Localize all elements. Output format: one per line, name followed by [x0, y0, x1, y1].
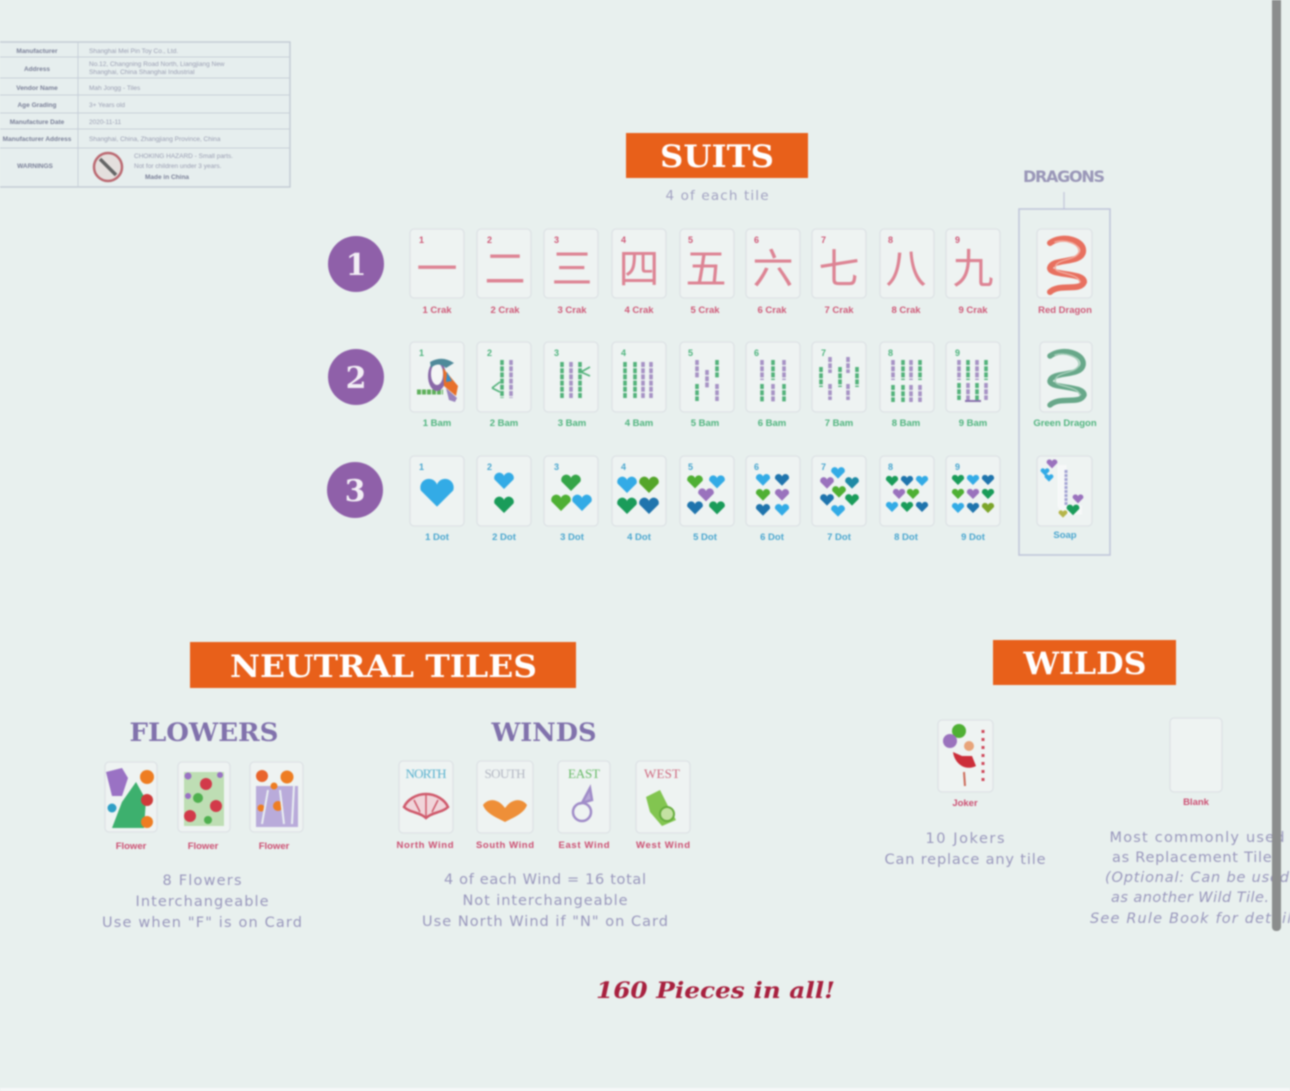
spec table: 3+ Years old	[89, 102, 125, 109]
section: jokers	[884, 720, 1046, 868]
row: crak tiles: 9	[955, 235, 960, 245]
row: dot tiles: 9 Dot	[961, 532, 986, 543]
row: crak tiles: 8	[888, 235, 893, 245]
row: crak tiles: 5 Crak	[690, 305, 720, 316]
row: dot tiles: 4 Dot	[627, 532, 652, 543]
icon: south butterfly	[483, 800, 527, 822]
section: blanks: Most commonly used	[1110, 830, 1284, 846]
section: winds: West Wind	[636, 840, 690, 851]
row: crak tiles: 7	[821, 235, 826, 245]
section: flowers: Use when "F" is on Card	[102, 915, 302, 931]
row: bam tiles	[410, 342, 1000, 429]
number badge 3: 3	[345, 474, 365, 509]
panel: dragons: Soap	[1053, 530, 1077, 541]
icon: north moth	[404, 794, 448, 818]
icon: no small parts warning	[94, 153, 122, 181]
icon: flower tile 3	[256, 770, 298, 827]
spec table: Manufacturer Address	[3, 136, 72, 143]
row: crak tiles: 7 Crak	[824, 305, 854, 316]
icon: toucan	[417, 359, 458, 402]
panel: dragons: Green Dragon	[1033, 418, 1097, 429]
row: crak tiles: 七	[818, 246, 860, 292]
row: crak tiles: 八	[886, 246, 926, 292]
section: flowers: FLOWERS	[130, 718, 278, 747]
row: bam tiles: 2 Bam	[490, 418, 518, 429]
section: winds: North Wind	[396, 840, 454, 851]
row: dot tiles: 5	[688, 462, 693, 472]
row: bam tiles: 5	[688, 348, 693, 358]
section: blanks: Blank	[1183, 797, 1210, 808]
row: dot tiles: 1	[419, 462, 424, 472]
number badge 3	[327, 462, 383, 518]
section: winds: NORTH	[406, 766, 446, 781]
row: bam tiles: 8 Bam	[892, 418, 920, 429]
spec table: Made in China	[145, 174, 189, 181]
spec table: CHOKING HAZARD - Small parts.	[134, 153, 233, 160]
row: crak tiles: 9 Crak	[958, 305, 988, 316]
row: bam tiles: 6	[754, 348, 759, 358]
icon: flower tile 1	[106, 768, 154, 828]
number badge 1: 1	[346, 248, 366, 283]
row: crak tiles: 4 Crak	[624, 305, 654, 316]
row: crak tiles: 6	[754, 235, 759, 245]
row: dot tiles: 2 Dot	[492, 532, 517, 543]
spec table: Address	[24, 66, 50, 73]
icon: green dragon	[1050, 352, 1084, 405]
row: dot tiles: 8	[888, 462, 893, 472]
icon: east rabbit	[573, 788, 592, 821]
row: crak tiles: 2 Crak	[490, 305, 520, 316]
row: crak tiles: 一	[416, 246, 458, 292]
panel: dragons: Red Dragon	[1038, 305, 1092, 316]
row: crak tiles: 2	[487, 235, 492, 245]
heading: wilds: WILDS	[1022, 646, 1146, 682]
section: flowers: Flower	[259, 841, 290, 852]
row: dot tiles: 2	[487, 462, 492, 472]
row: bam tiles: 1	[419, 348, 424, 358]
closing line: piece count: 160 Pieces in all!	[596, 978, 835, 1004]
section: winds: WEST	[644, 766, 680, 781]
icon: joker figure	[943, 724, 983, 786]
section: winds: WINDS	[490, 718, 596, 747]
row: bam tiles: 3	[554, 348, 559, 358]
section: flowers: Interchangeable	[136, 894, 269, 910]
row: crak tiles: 4	[621, 235, 626, 245]
icon: flower tile 2	[184, 772, 224, 826]
icon: soap tile frame	[1041, 459, 1083, 518]
section: jokers: Joker	[952, 798, 978, 809]
section: flowers	[102, 718, 303, 931]
spec table: Manufacturer	[16, 48, 58, 55]
section: winds	[396, 718, 690, 930]
row: dot tiles: 6	[754, 462, 759, 472]
row: dot tiles: 6 Dot	[760, 532, 785, 543]
section: winds: 4 of each Wind = 16 total	[444, 872, 646, 888]
row: crak tiles: 3 Crak	[557, 305, 587, 316]
section: blanks	[1090, 718, 1290, 927]
row: bam tiles: 3 Bam	[558, 418, 586, 429]
row: crak tiles: 九	[952, 246, 994, 292]
spec table: Manufacture Date	[10, 119, 65, 126]
panel: dragons	[1019, 192, 1110, 555]
row: crak tiles: 二	[484, 246, 526, 292]
section: blanks: as another Wild Tile.	[1111, 890, 1269, 906]
section: winds: South Wind	[476, 840, 534, 851]
row: crak tiles: 五	[686, 246, 726, 292]
heading: neutral tiles: NEUTRAL TILES	[230, 649, 537, 685]
row: bam tiles: 6 Bam	[758, 418, 786, 429]
heading: suits	[626, 133, 808, 178]
row: dot tiles	[410, 456, 1000, 543]
row: bam tiles: 7	[821, 348, 826, 358]
heading: wilds	[993, 640, 1176, 685]
section: blanks: (Optional: Can be used	[1105, 870, 1290, 886]
row: dot tiles: 9	[955, 462, 960, 472]
row: bam tiles: 1 Bam	[423, 418, 451, 429]
row: crak tiles: 1	[419, 235, 424, 245]
row: crak tiles: 5	[688, 235, 693, 245]
row: dot tiles: 5 Dot	[693, 532, 718, 543]
row: bam tiles: 2	[487, 348, 492, 358]
spec table: 2020-11-11	[89, 119, 122, 126]
row: dot tiles: 7 Dot	[827, 532, 852, 543]
section: winds: Not interchangeable	[462, 893, 628, 909]
row: crak tiles: 8 Crak	[891, 305, 921, 316]
row: dot tiles: 4	[621, 462, 626, 472]
section: flowers: Flower	[116, 841, 147, 852]
row: dot tiles: 3	[554, 462, 559, 472]
row: crak tiles: 四	[618, 246, 660, 292]
heading: dragons: DRAGONS	[1023, 167, 1105, 186]
row: bam tiles: 4 Bam	[625, 418, 653, 429]
number badge 2	[328, 349, 384, 405]
spec table: Shanghai, China Shanghai Industrial	[89, 69, 195, 76]
spec table	[0, 42, 290, 187]
row: bam tiles: 9 Bam	[959, 418, 987, 429]
section: winds: Use North Wind if "N" on Card	[422, 914, 668, 930]
section: winds: East Wind	[558, 840, 610, 851]
heading: suits: SUITS	[660, 139, 774, 175]
number badge 2: 2	[346, 361, 366, 396]
row: crak tiles: 六	[752, 246, 794, 292]
section: flowers: Flower	[188, 841, 219, 852]
section: winds: EAST	[568, 766, 600, 781]
row: dot tiles: 7	[821, 462, 826, 472]
row: crak tiles: 3	[554, 235, 559, 245]
spec table: Mah Jongg - Tiles	[89, 85, 141, 92]
suits subtitle: 4 of each tile	[666, 188, 768, 204]
spec table: Vendor Name	[16, 85, 58, 92]
row: dot tiles: 3 Dot	[560, 532, 585, 543]
row: bam tiles: 9	[955, 348, 960, 358]
section: blanks: as Replacement Tiles	[1112, 850, 1280, 866]
spec table: WARNINGS	[17, 163, 54, 170]
row: bam tiles: 5 Bam	[691, 418, 719, 429]
row: crak tiles: 1 Crak	[422, 305, 452, 316]
row: dot tiles: 8 Dot	[894, 532, 919, 543]
spec table: Not for children under 3 years.	[134, 163, 222, 170]
row: crak tiles: 6 Crak	[757, 305, 787, 316]
row: dot tiles: 1 Dot	[425, 532, 450, 543]
section: flowers: 8 Flowers	[162, 873, 242, 889]
icon: west leaf	[646, 790, 676, 826]
heading: neutral tiles	[190, 642, 576, 688]
section: jokers: Can replace any tile	[884, 852, 1046, 868]
spec table: Shanghai Mei Pin Toy Co., Ltd.	[89, 48, 178, 55]
scrollbar	[1272, 0, 1281, 931]
spec table: No.12, Changning Road North, Liangjiang New	[89, 61, 225, 68]
row: crak tiles	[410, 229, 1000, 316]
number badge 1	[328, 236, 384, 292]
row: bam tiles: 8	[888, 348, 893, 358]
row: bam tiles: 7 Bam	[825, 418, 853, 429]
spec table: Age Grading	[17, 102, 57, 109]
row: bam tiles: 4	[621, 348, 626, 358]
icon: red dragon	[1050, 239, 1084, 292]
section: jokers: 10 Jokers	[926, 831, 1004, 847]
row: crak tiles: 三	[552, 246, 592, 292]
section: winds: SOUTH	[484, 766, 526, 781]
spec table: Shanghai, China, Zhangjiang Province, China	[89, 136, 221, 143]
